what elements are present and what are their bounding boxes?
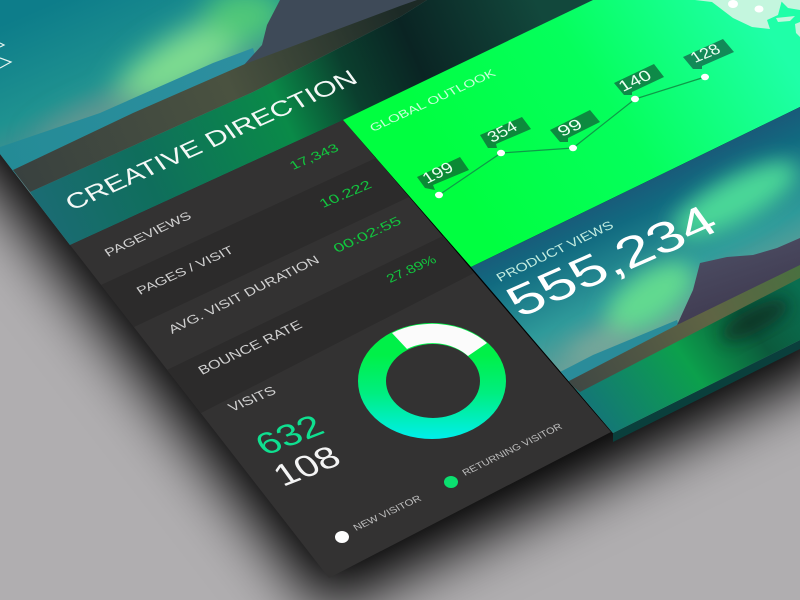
water shadow (716, 292, 794, 348)
metric: pageviews (102, 141, 342, 259)
metric: bounce rate: 27.89% (384, 253, 439, 285)
metric: pages per visit (134, 177, 375, 297)
visits heading: VISITS (225, 383, 279, 414)
panel: global outlook (343, 0, 800, 267)
line chart (417, 39, 734, 198)
legend: returning visitor: RETURNING VISITOR (460, 421, 565, 478)
legend: returning visitor (444, 421, 565, 488)
water (570, 278, 800, 433)
data label 140 (614, 64, 664, 95)
board side edge (613, 340, 800, 442)
donut chart (358, 323, 506, 439)
data label 354: 354 (484, 119, 521, 146)
aurora glow (32, 0, 280, 136)
heading: PRODUCT VIEWS (494, 218, 616, 284)
legend: new visitor (335, 493, 424, 543)
photo (460, 100, 800, 440)
data label 99 (550, 110, 600, 142)
alternating metric rows (101, 158, 474, 413)
shoreline (13, 0, 427, 192)
mountain (243, 0, 425, 66)
shoreline (567, 265, 800, 392)
visits count: returning: 632 (248, 408, 331, 462)
heading: GLOBAL OUTLOOK (368, 68, 499, 134)
data label 99: 99 (554, 116, 586, 140)
distant teal hill (0, 48, 262, 175)
panel: top photo with header band (0, 0, 600, 250)
mountain (677, 238, 800, 325)
metric: pageviews: PAGEVIEWS (102, 209, 194, 259)
data label 140: 140 (615, 67, 655, 95)
metric: average visit duration: AVG. VISIT DURATION (166, 253, 322, 336)
metric: average visit duration (166, 213, 404, 336)
aurora glow (562, 148, 800, 371)
data label 199: 199 (419, 160, 457, 187)
panel background (70, 120, 611, 578)
green background (343, 0, 800, 267)
metric: pages per visit: 10.222 (316, 177, 375, 210)
data label 199 (417, 157, 469, 190)
metric: bounce rate (195, 253, 439, 377)
title: CREATIVE DIRECTION (60, 65, 362, 215)
data label 128 (683, 39, 734, 69)
icon: corner outline (0, 43, 11, 68)
data label 354 (480, 117, 531, 148)
data label 128: 128 (687, 41, 724, 66)
photo sky (0, 0, 600, 250)
visits count: new: 108 (266, 439, 348, 493)
metric: pageviews: 17,343 (287, 141, 342, 172)
water band behind header (30, 0, 600, 250)
map of north america (695, 0, 800, 37)
metric: average visit duration: 00:02:55 (330, 213, 404, 255)
distant teal hill (560, 320, 680, 385)
panel: product views photo (460, 100, 800, 442)
legend: new visitor: NEW VISITOR (351, 493, 424, 533)
panel: metrics and visits (70, 120, 611, 578)
metric: bounce rate: BOUNCE RATE (195, 317, 305, 377)
sky (460, 100, 800, 440)
big number: 555,234 (496, 195, 727, 326)
metric: pages per visit: PAGES / VISIT (134, 243, 237, 297)
